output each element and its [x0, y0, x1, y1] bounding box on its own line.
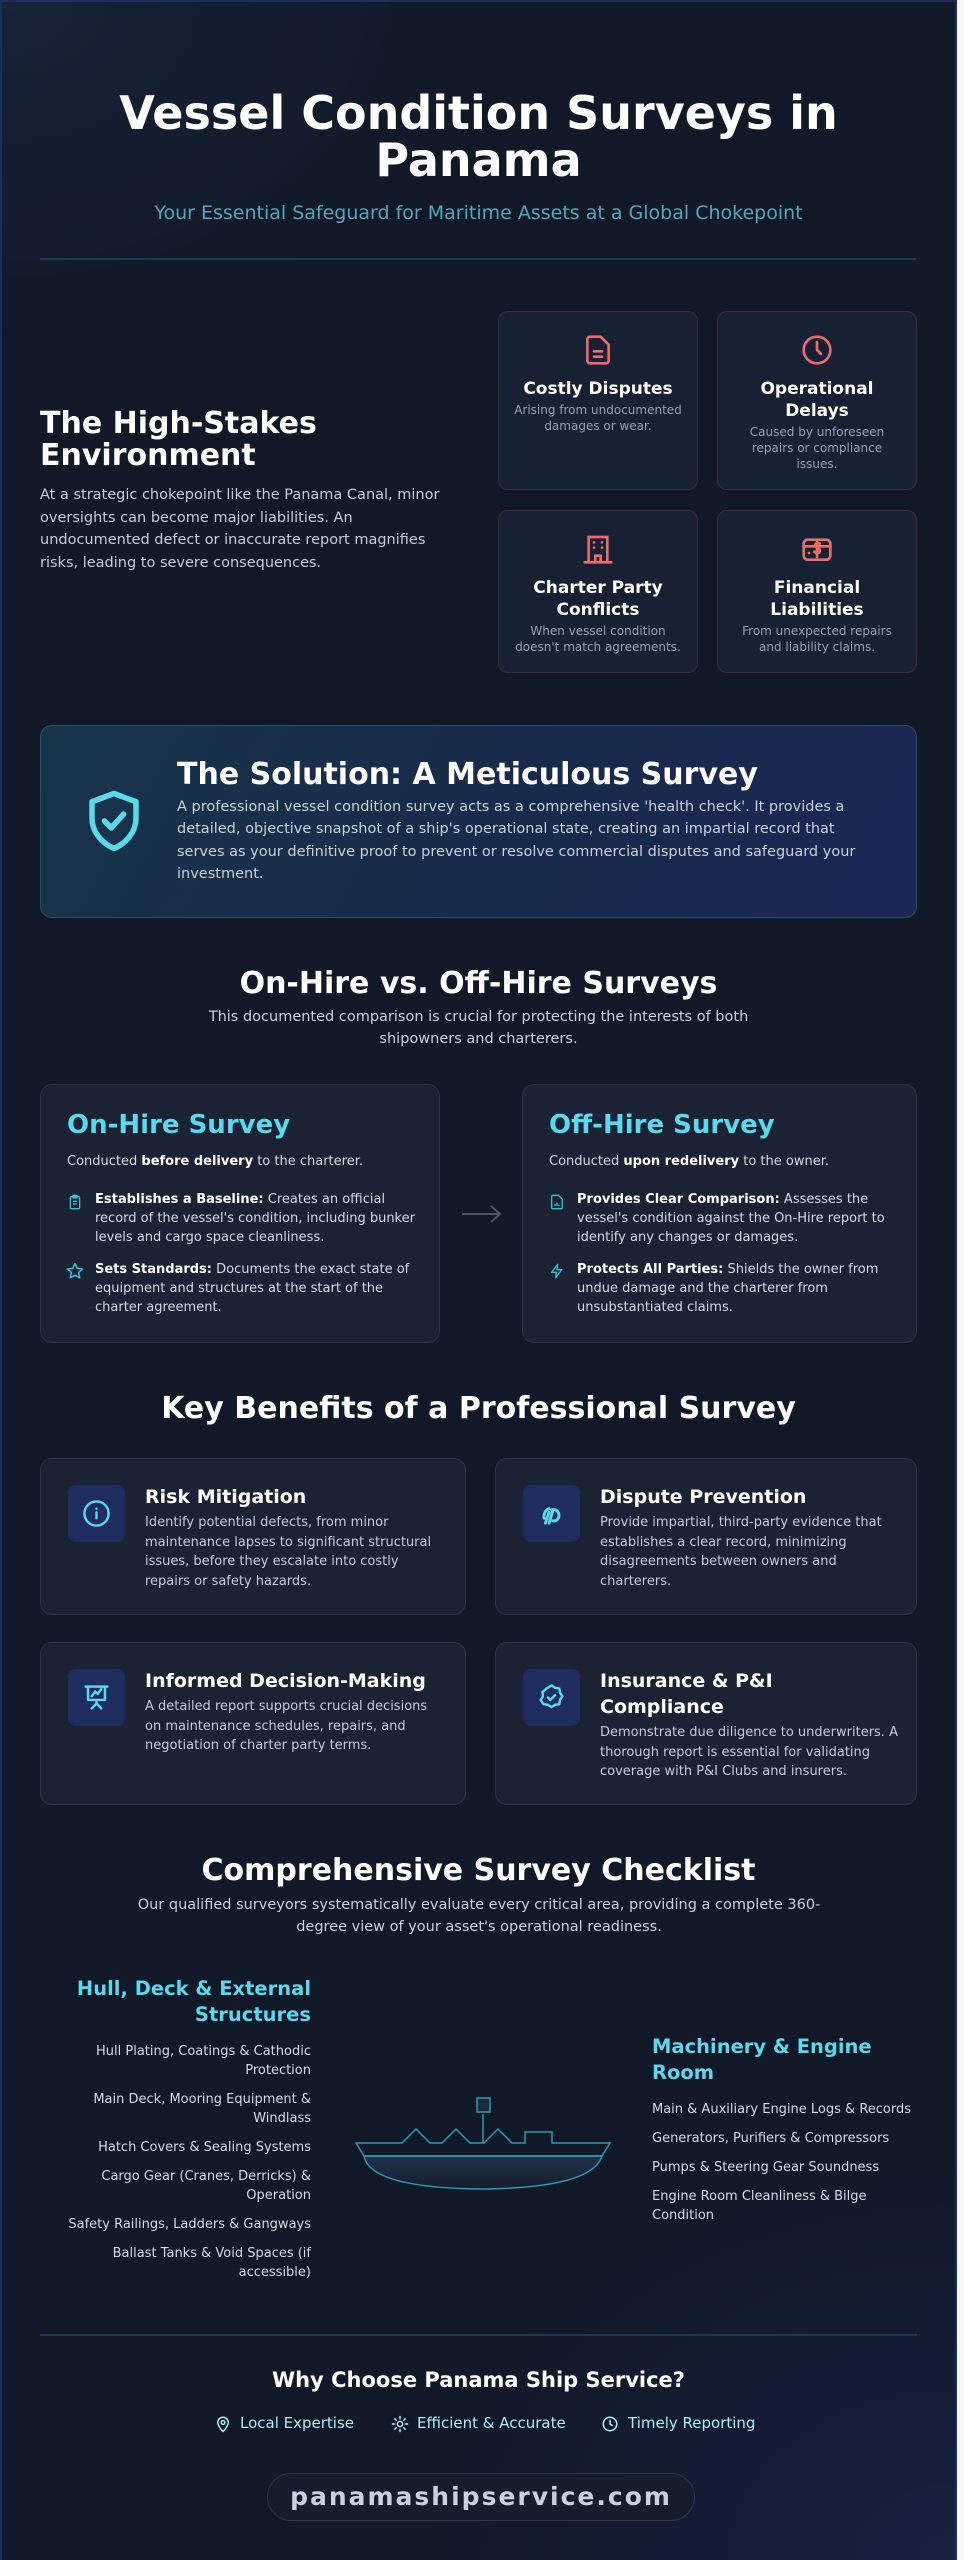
panel: insurance compliance: Demonstrate due diligence to underwriters. A thorough report is essential for validating coverage with P&I Clubs and insurers. — [600, 1725, 898, 1779]
title: Vessel Condition Surveys in — [119, 86, 838, 140]
panel: insurance compliance: Insurance & P&I — [600, 1670, 773, 1692]
panel: hull checklist: Hull Plating, Coatings & Cathodic — [96, 2044, 311, 2059]
title: Panama — [375, 133, 582, 187]
panel: operational delays: repairs or compliance — [752, 441, 882, 455]
icon: clipboard — [70, 1194, 80, 1210]
icon: shield check — [89, 790, 139, 852]
panel: off-hire survey: Protects All Parties: Shields the owner from undue damage and the charterer from unsubstantiated claims. — [577, 1262, 878, 1315]
panel: on-hire survey — [40, 1084, 440, 1343]
panel: machinery checklist: Generators, Purifiers & Compressors — [652, 2131, 889, 2146]
subtitle: Your Essential Safeguard for Maritime Assets at a Global Chokepoint — [154, 202, 803, 224]
panel: hull checklist: Main Deck, Mooring Equipment & — [93, 2092, 311, 2107]
icon: presentation chart — [68, 1669, 125, 1726]
icon: report — [551, 1194, 563, 1210]
panel: risk mitigation: Risk Mitigation — [145, 1486, 306, 1508]
panel: on-hire survey: On-Hire Survey — [67, 1110, 290, 1140]
icon: building — [583, 536, 613, 564]
heading: checklist: Comprehensive Survey Checklist — [202, 1853, 755, 1888]
heading: why choose: Why Choose Panama Ship Service? — [272, 2368, 685, 2392]
url pill — [267, 2473, 695, 2521]
heading: solution: The Solution: A Meticulous Survey — [177, 757, 758, 792]
panel: off-hire survey: Conducted upon redelivery to the owner. — [549, 1154, 829, 1169]
panel: costly disputes: Arising from undocumented — [514, 403, 682, 417]
heading: on-hire vs off-hire: On-Hire vs. Off-Hire Surveys — [240, 966, 717, 1001]
panel: hull checklist: Cargo Gear (Cranes, Derricks) & — [101, 2169, 311, 2184]
panel: on-hire survey: Sets Standards: Documents the exact state of equipment and structures at the start of the charter agreement. — [95, 1262, 409, 1315]
features row: Efficient & Accurate — [417, 2414, 566, 2432]
icon: money — [802, 538, 832, 561]
icon: info — [68, 1485, 125, 1542]
panel: hull checklist: Windlass — [253, 2111, 311, 2126]
panel: operational delays: Operational Delays — [760, 379, 874, 421]
icon: handshake — [523, 1485, 580, 1542]
panel: machinery checklist: Condition — [652, 2208, 714, 2223]
heading: high-stakes: The High-Stakes — [40, 406, 317, 441]
text: comparison intro: This documented comparison is crucial for protecting the interests of both shipowners and charterers. — [209, 1009, 748, 1047]
panel: risk mitigation — [40, 1458, 466, 1615]
panel: hull checklist: accessible) — [239, 2265, 311, 2280]
panel: hull checklist: Protection — [245, 2063, 311, 2078]
panel: charter party conflicts: When vessel condition — [530, 624, 666, 638]
icon: badge check — [523, 1669, 580, 1726]
panel: charter party conflicts — [498, 510, 698, 673]
panel: dispute prevention — [495, 1458, 917, 1615]
panel: dispute prevention: Provide impartial, third-party evidence that establishes a clear record, minimizing disagreements between owners and charterers. — [600, 1515, 882, 1588]
panel: operational delays: Caused by unforeseen — [750, 425, 884, 439]
panel: costly disputes: Costly Disputes — [523, 379, 673, 399]
arrow — [462, 1205, 502, 1223]
panel: machinery checklist: Room — [652, 2061, 714, 2084]
panel: informed decision-making: A detailed report supports crucial decisions on maintenance schedules, repairs, and negotiation of charter party terms. — [145, 1699, 427, 1753]
text: high-stakes intro: At a strategic chokepoint like the Panama Canal, minor oversights can become major liabilities. An undocumented defect or inaccurate report magnifies risks, leading to severe consequences. — [40, 487, 439, 570]
icon: map pin — [217, 2416, 229, 2432]
text: checklist intro: Our qualified surveyors systematically evaluate every critical area, providing a complete 360-degree view of your asset's operational readiness. — [138, 1897, 820, 1935]
heading: high-stakes — [40, 406, 317, 473]
panel: machinery checklist: Machinery & Engine — [652, 2035, 872, 2058]
panel: on-hire survey: Conducted before delivery to the charterer. — [67, 1154, 363, 1169]
panel: financial liabilities: Financial Liabilities — [770, 578, 864, 620]
icon: bolt — [551, 1264, 562, 1278]
title — [119, 86, 838, 187]
icon: clock — [602, 2416, 618, 2432]
panel: operational delays: issues. — [797, 457, 837, 471]
panel: charter party conflicts: doesn't match agreements. — [515, 640, 681, 654]
panel: costly disputes — [498, 311, 698, 490]
panel: machinery checklist — [652, 2035, 911, 2223]
features row: Local Expertise — [240, 2414, 354, 2432]
panel: hull checklist — [68, 1977, 312, 2280]
icon: gear — [392, 2416, 408, 2432]
panel: financial liabilities — [717, 510, 917, 673]
panel: costly disputes: damages or wear. — [544, 419, 652, 433]
panel: solution — [40, 725, 917, 918]
panel: machinery checklist: Pumps & Steering Gear Soundness — [652, 2160, 879, 2175]
heading: key benefits: Key Benefits of a Professional Survey — [161, 1391, 796, 1426]
panel: charter party conflicts: Charter Party Conflicts — [533, 578, 663, 620]
panel: off-hire survey: Off-Hire Survey — [549, 1110, 775, 1140]
panel: on-hire survey: Establishes a Baseline: Creates an official record of the vessel's condition, including bunker levels and cargo space cleanliness. — [95, 1192, 415, 1245]
panel: risk mitigation: Identify potential defects, from minor maintenance lapses to significant structural issues, before they escalate into costly repairs or safety hazards. — [145, 1515, 431, 1588]
text: solution: A professional vessel condition survey acts as a comprehensive 'health check'. It provides a detailed, objective snapshot of a ship's operational state, creating an impartial record that serves as your definitive proof to prevent or resolve commercial disputes and safeguard your investment. — [177, 799, 855, 882]
icon: clock — [802, 335, 832, 365]
panel: insurance compliance — [495, 1642, 917, 1805]
panel: insurance compliance: Compliance — [600, 1696, 724, 1718]
icon: star — [66, 1262, 84, 1279]
panel: hull checklist: Operation — [246, 2188, 311, 2203]
icon: ship — [354, 2097, 612, 2190]
heading: high-stakes: Environment — [40, 438, 256, 473]
panel: hull checklist: Ballast Tanks & Void Spaces (if — [113, 2246, 311, 2261]
panel: hull checklist: Structures — [195, 2003, 311, 2026]
panel: hull checklist: Safety Railings, Ladders & Gangways — [68, 2217, 311, 2232]
panel: dispute prevention: Dispute Prevention — [600, 1486, 806, 1508]
panel: off-hire survey — [522, 1084, 917, 1343]
panel: machinery checklist: Engine Room Cleanliness & Bilge — [652, 2189, 867, 2204]
panel: financial liabilities: and liability claims. — [759, 640, 875, 654]
panel: hull checklist: Hull, Deck & External — [77, 1977, 311, 2000]
features row — [217, 2414, 755, 2432]
panel: machinery checklist: Main & Auxiliary Engine Logs & Records — [652, 2102, 911, 2117]
panel: operational delays — [717, 311, 917, 490]
panel: off-hire survey: Provides Clear Comparison: Assesses the vessel's condition against the On-Hire report to identify any changes or damages. — [577, 1192, 885, 1245]
url pill: panamashipservice.com — [290, 2482, 672, 2511]
panel: informed decision-making — [40, 1642, 466, 1805]
icon: document — [586, 335, 610, 365]
panel: financial liabilities: From unexpected repairs — [742, 624, 892, 638]
panel: informed decision-making: Informed Decision-Making — [145, 1670, 426, 1692]
features row: Timely Reporting — [628, 2414, 755, 2432]
panel: hull checklist: Hatch Covers & Sealing Systems — [98, 2140, 311, 2155]
